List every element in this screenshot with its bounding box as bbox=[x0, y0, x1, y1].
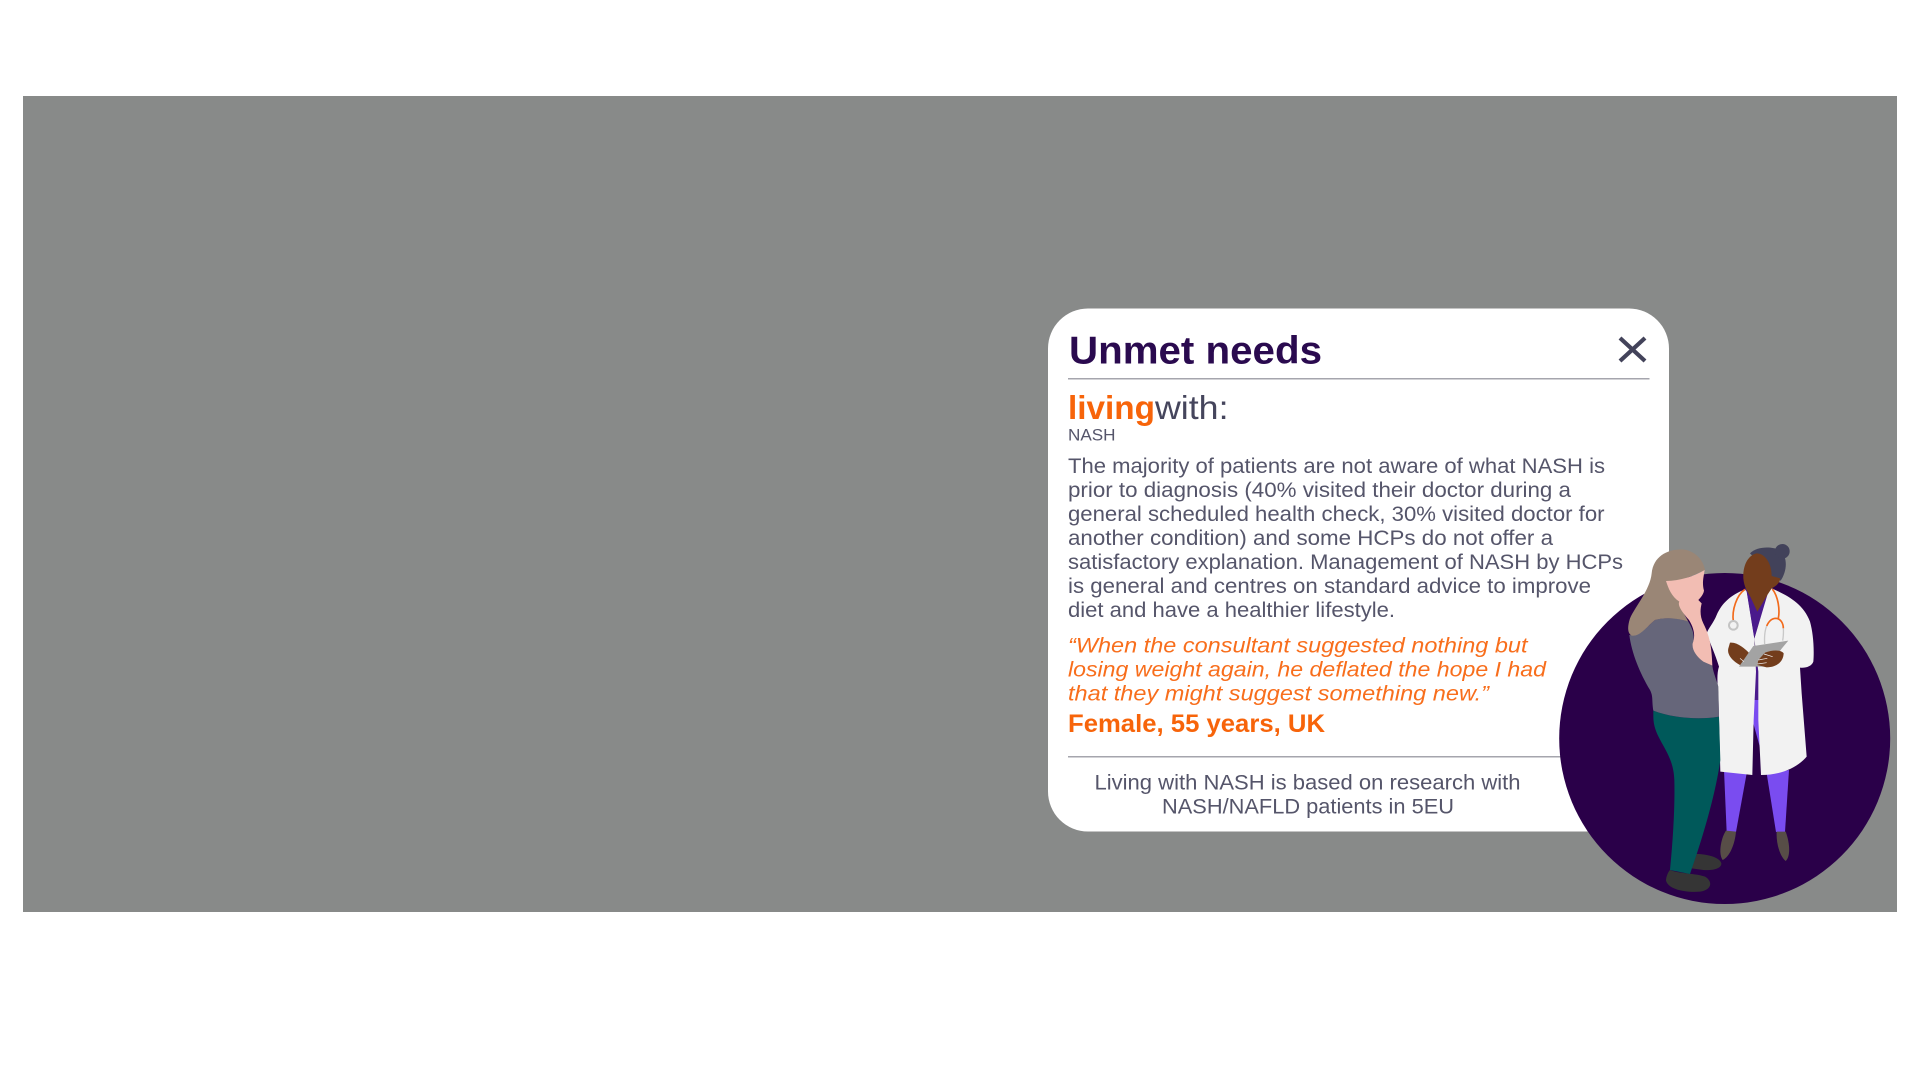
illustration: patient and doctor in purple circle bbox=[1559, 544, 1890, 904]
body text block: The majority of patients are not aware of what NASH is bbox=[1068, 454, 1605, 478]
footnote bbox=[1094, 770, 1520, 818]
body text block: diet and have a healthier lifestyle. bbox=[1068, 598, 1395, 622]
subheading: NASH: NASH bbox=[1068, 426, 1116, 444]
quote attribution: Female, 55 years, UK bbox=[1068, 710, 1325, 738]
panel: unmet needs card bbox=[1048, 308, 1669, 832]
footnote: NASH/NAFLD patients in 5EU bbox=[1162, 794, 1454, 818]
brand label: living with: with: bbox=[1154, 389, 1228, 426]
body text block bbox=[1068, 454, 1623, 622]
footnote: Living with NASH is based on research with bbox=[1094, 770, 1520, 794]
icon: close cross bbox=[1620, 338, 1645, 361]
heading: unmet needs: Unmet needs bbox=[1069, 330, 1322, 372]
patient quote: that they might suggest something new.” bbox=[1068, 682, 1490, 706]
brand label: living with: living bbox=[1068, 389, 1155, 426]
brand label: living with bbox=[1068, 389, 1228, 426]
body text block: general scheduled health check, 30% visited doctor for bbox=[1068, 502, 1604, 526]
figure: doctor bbox=[1707, 544, 1814, 861]
body text block: prior to diagnosis (40% visited their doctor during a bbox=[1068, 478, 1571, 502]
patient quote: losing weight again, he deflated the hope I had bbox=[1068, 658, 1547, 682]
body text block: satisfactory explanation. Management of NASH by HCPs bbox=[1068, 550, 1623, 574]
body text block: another condition) and some HCPs do not offer a bbox=[1068, 526, 1553, 550]
patient quote: “When the consultant suggested nothing but bbox=[1068, 634, 1529, 658]
body text block: is general and centres on standard advice to improve bbox=[1068, 574, 1591, 598]
figure: patient bbox=[1628, 549, 1721, 892]
patient quote bbox=[1068, 634, 1547, 706]
grey backdrop panel bbox=[23, 96, 1897, 912]
